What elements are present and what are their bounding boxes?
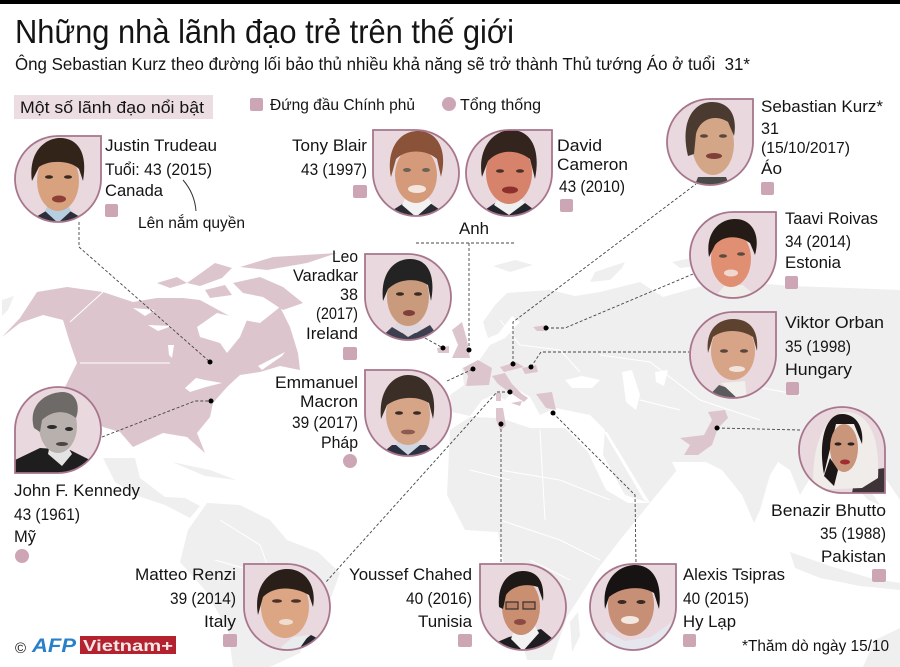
- name and details: Pháp: [321, 433, 358, 452]
- portrait: [466, 130, 552, 223]
- name and details: [683, 565, 785, 631]
- name and details: Leo: [332, 247, 358, 266]
- name and details: 38: [340, 285, 358, 304]
- role marker: [15, 549, 29, 563]
- role marker: [761, 182, 774, 195]
- name and details: Pakistan: [821, 547, 886, 566]
- portrait: [667, 99, 753, 187]
- annotation: Lên nắm quyền: [138, 215, 245, 232]
- profile: Benazir Bhutto: [771, 407, 886, 582]
- name and details: Tunisia: [418, 612, 473, 631]
- name and details: [761, 97, 883, 178]
- name and details: 43 (2010): [559, 177, 625, 196]
- name and details: 35 (1988): [820, 524, 886, 543]
- name and details: [293, 247, 358, 343]
- annotation arrow: [183, 180, 196, 211]
- profile: Viktor Orban: [690, 312, 884, 403]
- top bar: [0, 0, 900, 4]
- role marker: [105, 204, 118, 217]
- subtitle: Ông Sebastian Kurz theo đường lối bảo thủ nhiều khả năng sẽ trở thành Thủ tướng Áo ở tuổi 31*: [15, 53, 750, 74]
- profile: Justin Trudeau: [15, 136, 245, 232]
- name and details: Youssef Chahed: [349, 565, 472, 584]
- name and details: Italy: [204, 612, 237, 631]
- section heading: Một số lãnh đạo nổi bật: [20, 98, 204, 117]
- name and details: 40 (2015): [683, 589, 749, 608]
- name and details: Justin Trudeau: [105, 136, 217, 155]
- portrait: [690, 312, 776, 403]
- name and details: [557, 136, 628, 196]
- portrait: [799, 407, 885, 493]
- profile: David Cameron: [466, 130, 628, 223]
- portrait: [590, 564, 676, 652]
- name and details: Matteo Renzi: [135, 565, 236, 584]
- portrait: [373, 130, 459, 223]
- name and details: Varadkar: [293, 266, 358, 285]
- portrait: [480, 564, 566, 652]
- name and details: 43 (1961): [14, 505, 80, 524]
- credit logos: [15, 636, 176, 657]
- portrait: [365, 254, 451, 342]
- name and details: Taavi Roivas: [785, 209, 878, 228]
- name and details: 31: [761, 119, 779, 138]
- name and details: [275, 373, 358, 452]
- profile: Emmanuel Macron: [275, 370, 451, 468]
- legend: [250, 96, 541, 114]
- profile: Matteo Renzi: [135, 564, 330, 652]
- name and details: David: [557, 136, 602, 155]
- role marker: [343, 347, 357, 360]
- profile: Sebastian Kurz: [667, 97, 883, 195]
- name and details: Sebastian Kurz*: [761, 97, 883, 116]
- role marker: [872, 569, 886, 582]
- name and details: Canada: [105, 181, 164, 200]
- portrait: [365, 370, 451, 458]
- footnote: *Thăm dò ngày 15/10: [742, 638, 889, 655]
- role marker: [786, 382, 799, 395]
- role marker: [343, 454, 357, 468]
- name and details: John F. Kennedy: [14, 481, 140, 500]
- role marker: [223, 634, 237, 647]
- profile: Alexis Tsipras: [590, 564, 785, 652]
- name and details: [292, 136, 367, 179]
- name and details: 43 (1997): [301, 160, 367, 179]
- name and details: Mỹ: [14, 527, 36, 546]
- name and details: [349, 565, 473, 631]
- legend: Tổng thống: [460, 96, 541, 114]
- name and details: Benazir Bhutto: [771, 501, 886, 520]
- name and details: Tuổi: 43 (2015): [105, 160, 212, 179]
- credit logos: AFP: [31, 636, 76, 657]
- name and details: [771, 501, 886, 566]
- name and details: Cameron: [557, 155, 628, 174]
- portrait: [15, 136, 101, 229]
- name and details: Viktor Orban: [785, 313, 884, 332]
- role marker: [353, 185, 367, 198]
- name and details: Estonia: [785, 253, 842, 272]
- title: Những nhà lãnh đạo trẻ trên thế giới: [15, 13, 514, 50]
- portrait: [244, 564, 330, 652]
- name and details: Emmanuel: [275, 373, 358, 392]
- credit logos: ©: [15, 640, 26, 657]
- world map: [2, 253, 900, 667]
- name and details: 39 (2014): [170, 589, 236, 608]
- legend: Đứng đầu Chính phủ: [270, 97, 415, 114]
- profile: Tony Blair: [292, 130, 459, 223]
- credit logos: Vietnam+: [83, 638, 173, 655]
- role marker: [560, 199, 573, 212]
- portrait: [15, 387, 101, 473]
- name and details: [135, 565, 237, 631]
- name and details: 40 (2016): [406, 589, 472, 608]
- name and details: 34 (2014): [785, 232, 851, 251]
- name and details: Hungary: [785, 360, 853, 379]
- name and details: Tony Blair: [292, 136, 367, 155]
- name and details: Macron: [300, 392, 358, 411]
- portrait: [690, 212, 776, 303]
- profile: Taavi Roivas: [690, 209, 878, 303]
- name and details: 35 (1998): [785, 337, 851, 356]
- profile: Youssef Chahed: [349, 564, 566, 652]
- role marker: [683, 634, 696, 647]
- name and details: Ireland: [306, 324, 358, 343]
- name and details: (15/10/2017): [761, 140, 850, 157]
- name and details: [785, 209, 878, 272]
- name and details: Áo: [761, 159, 782, 178]
- country label: Anh: Anh: [459, 219, 489, 238]
- name and details: 39 (2017): [292, 413, 358, 432]
- profile: Leo Varadkar: [293, 247, 451, 360]
- leader lines: [79, 184, 800, 582]
- role marker: [458, 634, 472, 647]
- name and details: (2017): [316, 304, 358, 323]
- profile: John F. Kennedy: [14, 387, 140, 563]
- name and details: [785, 313, 884, 379]
- name and details: [105, 136, 217, 200]
- name and details: [14, 481, 140, 546]
- name and details: Hy Lạp: [683, 612, 736, 631]
- role marker: [785, 276, 798, 289]
- name and details: Alexis Tsipras: [683, 565, 785, 584]
